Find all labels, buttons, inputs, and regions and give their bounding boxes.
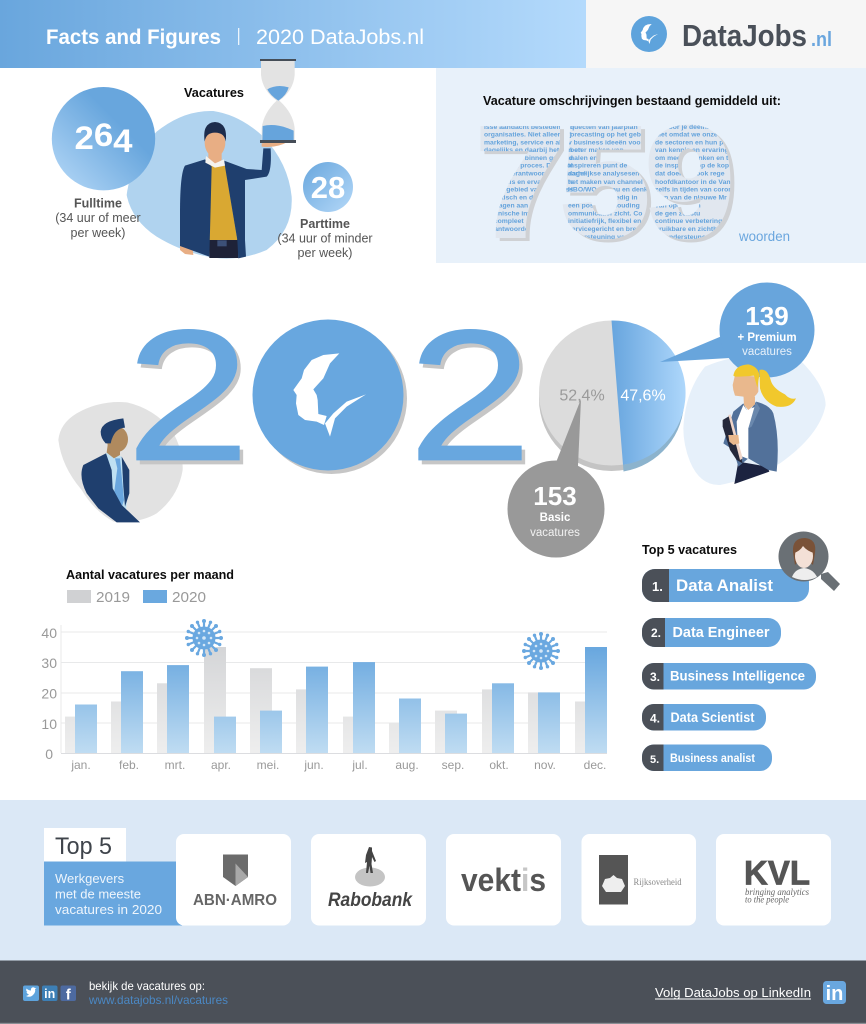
logo wordmark: DataJobs	[682, 18, 807, 53]
heading: top 5 vacatures: Top 5 vacatures	[642, 543, 737, 557]
big number 759: v business ideeën voor	[568, 140, 644, 146]
card: KVL: KVL	[744, 854, 810, 892]
item 5: 5.	[650, 754, 659, 766]
pie chart	[539, 320, 686, 472]
callout: basic: 153	[533, 481, 577, 511]
item 2: 2.	[651, 626, 661, 640]
grey slice	[539, 320, 684, 466]
month labels: okt.	[489, 758, 509, 772]
item 1	[642, 569, 809, 602]
hourglass	[260, 59, 296, 143]
card: Rijksoverheid	[582, 834, 696, 926]
label: employers: vacatures in 2020	[55, 902, 162, 917]
illustration: man in suit	[58, 402, 183, 522]
big number 759: een positieve houding	[568, 202, 640, 210]
item 2: Data Engineer	[672, 625, 770, 641]
stat: parttime 28	[303, 162, 353, 212]
callout: basic	[508, 399, 604, 558]
panel: top employers	[0, 800, 866, 961]
blob	[127, 111, 292, 259]
big number 759: HBO/WO niveau en denk	[568, 186, 648, 194]
label: employers	[44, 862, 182, 926]
month labels	[70, 758, 606, 772]
label woorden: woorden	[738, 229, 790, 244]
grey blob	[58, 402, 183, 522]
y axis labels: 40	[41, 625, 57, 641]
big number 759: nalen en de	[570, 155, 608, 162]
big number 759: dagelijkse analysesen	[568, 170, 639, 178]
label: parttime: (34 uur of minder	[277, 232, 373, 246]
callout: premium	[660, 282, 814, 378]
panel heading: Vacature omschrijvingen bestaand gemiddeld uit:	[483, 93, 781, 108]
big number 759: marketing, service en alle	[484, 140, 567, 146]
card: ABN AMRO: ABN·AMRO	[193, 892, 277, 909]
month labels: mei.	[257, 758, 279, 772]
big year digit: first 2: 2	[129, 295, 254, 504]
big number 759: 759	[478, 97, 732, 266]
label: parttime: Parttime	[300, 217, 350, 231]
stat: fulltime 264: 4	[113, 123, 133, 159]
woman backdrop blob	[683, 355, 826, 485]
label: employers: met de meeste	[55, 886, 141, 902]
big number 759: op het gebied van business	[484, 186, 573, 194]
callout: premium: 139	[745, 301, 789, 331]
stat: fulltime 264: 6	[94, 117, 113, 153]
heading: vacatures: Vacatures	[184, 85, 244, 100]
big number 759: en voor je deelname aan	[655, 124, 734, 131]
big number 759: de sectoren en hun persoon	[655, 140, 746, 146]
card: KVL	[716, 834, 831, 926]
y axis labels: 20	[41, 686, 57, 702]
icon: linkedin small: in	[44, 987, 55, 1001]
label: employers: Werkgevers	[55, 871, 125, 886]
pie depth	[539, 327, 684, 471]
big number 759: niet omdat we onze klanten	[655, 132, 743, 139]
month labels: sep.	[442, 758, 464, 772]
big year digit: first 2: 2	[126, 291, 250, 500]
chart legend	[67, 589, 206, 606]
label: fulltime: per week)	[71, 226, 125, 240]
month labels: mrt.	[165, 758, 185, 772]
big number 759: om mee te denken en te v	[655, 155, 738, 162]
big number 759: verantwoordelijk	[484, 226, 538, 233]
value: 52,4%: 52,4%	[559, 388, 605, 404]
big number 759: dagelijks en daarbij het zijn en	[484, 147, 582, 154]
big number 759: technische inv	[484, 210, 531, 218]
big number 759: zien van de nieuwe Mr	[655, 194, 727, 202]
big number 759: continue verbetering a	[655, 218, 728, 225]
item 1: 1.	[652, 579, 663, 594]
big number 759: bijdragen aan de	[484, 202, 538, 210]
big number 759: analytisch en data gericht	[484, 194, 568, 202]
footer text: bekijk: bekijk de vacatures op:	[89, 979, 205, 993]
month labels: jul.	[351, 758, 368, 772]
month labels: jun.	[303, 758, 324, 772]
callout: basic: Basic	[540, 512, 571, 524]
header banner	[0, 0, 586, 68]
big year digit: second 2: 2	[408, 291, 532, 500]
item 2	[642, 618, 781, 647]
item 3: Business Intelligence	[670, 668, 805, 684]
month labels: feb.	[119, 758, 139, 772]
card: ABN AMRO	[176, 834, 291, 926]
icon: virus november	[522, 632, 560, 670]
big number 759: en ondersteunen	[655, 234, 710, 241]
big number 759: initiatiefrijk, flexibel en	[568, 218, 641, 225]
icon: twitter	[23, 986, 39, 1001]
card: KVL: bringing analytics	[745, 887, 809, 897]
big year digit: second 2: 2	[411, 295, 536, 504]
item 4	[642, 704, 766, 730]
label: fulltime: Fulltime	[74, 196, 122, 210]
big number 759: hoofdkantoor in de Van Ne	[655, 179, 741, 186]
logo suffix: .nl	[811, 29, 832, 51]
big number 759: beter maken van	[570, 147, 624, 154]
item 3: 3.	[650, 670, 660, 684]
man figure	[180, 122, 289, 258]
logo icon	[631, 16, 667, 52]
big number 759: ondersteuning van	[568, 234, 629, 241]
blue slice	[612, 320, 686, 465]
footer link: url: www.datajobs.nl/vacatures	[88, 993, 228, 1007]
bars 2020	[75, 647, 607, 753]
big number 759: forecasting op het gebi	[568, 132, 643, 139]
heading separator	[238, 28, 239, 45]
month labels: aug.	[395, 758, 419, 772]
stat: fulltime 264	[52, 87, 155, 190]
big number 759: je bent verantwoordelijk daarhe	[483, 170, 586, 178]
icon: linkedin large: in	[826, 983, 843, 1005]
callout: basic: vacatures	[530, 527, 580, 539]
illustration: woman with books	[723, 364, 796, 484]
big number 759: en compleet	[484, 218, 524, 225]
callout: premium: vacatures	[742, 346, 792, 358]
month labels: nov.	[534, 758, 556, 772]
panel: word count	[436, 68, 866, 269]
item 1: Data Analist	[676, 577, 774, 595]
icon: virus april	[185, 619, 223, 657]
card: vektis	[446, 834, 561, 926]
big number 759: vaardig en volledig in	[568, 194, 638, 202]
y axis labels	[41, 625, 57, 762]
label: parttime	[277, 217, 373, 260]
chart legend: 2020	[172, 589, 206, 606]
y axis labels: 10	[41, 716, 57, 732]
label: top 5: Top 5	[55, 833, 112, 860]
big number 759: dat doen wij ook rege	[655, 170, 725, 178]
icon: magnifier with candidate	[778, 532, 840, 591]
illustration: man holding hourglass	[127, 59, 296, 259]
card: vektis: vektis	[461, 862, 546, 898]
callout: premium: + Premium	[737, 332, 797, 344]
footer link: follow: Volg DataJobs op LinkedIn	[655, 985, 811, 1000]
big number 759: quecten van jaarplan	[570, 124, 638, 131]
big number 759: 759	[482, 100, 736, 269]
big number 759: hij doet dit proces. Deze rol	[484, 162, 573, 170]
item 3	[642, 663, 816, 690]
big number 759: ommunicatief zicht. Co	[568, 210, 642, 218]
big number 759	[480, 124, 734, 242]
stat: fulltime 264: 2	[74, 120, 92, 156]
big number 759: bruikbare en zichtbare	[655, 226, 728, 233]
y axis labels: 0	[45, 746, 53, 762]
card: KVL: to the people	[745, 894, 789, 904]
bar chart: vacancies per month	[41, 625, 607, 772]
bars 2019	[65, 647, 597, 753]
y axis labels: 30	[41, 655, 57, 671]
big number 759: de gen zelfstu	[655, 210, 700, 218]
item 5: Business analist	[670, 753, 755, 765]
heading: facts and figures: Facts and Figures	[46, 26, 221, 49]
big number 759: de inspiratie op de kop ka	[655, 162, 739, 170]
logo panel	[586, 0, 866, 68]
big number 759: inspireren punt de	[568, 162, 628, 170]
big number 759: de analist is binnen gesteld	[484, 155, 573, 162]
item 4: 4.	[650, 712, 660, 726]
month labels: jan.	[70, 758, 91, 772]
label: fulltime: (34 uur of meer	[55, 211, 141, 225]
top list	[642, 569, 816, 771]
big number 759: het maken van channel	[568, 179, 643, 186]
icon: facebook: f	[66, 986, 72, 1004]
chart legend: 2019	[96, 589, 130, 606]
value: 47,6%: 47,6%	[620, 388, 666, 404]
footer bar	[0, 960, 866, 1024]
label: parttime: per week)	[298, 246, 352, 260]
man figure	[81, 418, 140, 522]
big number 759: van kennis en ervaring. Wij	[655, 147, 743, 154]
month labels: apr.	[211, 758, 231, 772]
chart heading: Aantal vacatures per maand	[66, 568, 234, 582]
card: Rabobank	[311, 834, 426, 926]
big number 759: zelfs in tijden van coron	[655, 186, 732, 194]
item 4: Data Scientist	[670, 710, 755, 725]
month labels: dec.	[584, 758, 606, 772]
big number 759: van open plan	[655, 202, 701, 210]
card: Rijksoverheid: Rijksoverheid	[634, 877, 682, 887]
card: Rabobank: Rabobank	[328, 890, 413, 911]
label: top 5	[44, 828, 126, 862]
big number 759: de kennis en ervaring om te	[484, 179, 574, 186]
stat: parttime 28: 28	[311, 170, 345, 205]
big number 759: servicegericht en bre	[568, 226, 637, 233]
big number 759: organisaties. Niet alleen bij	[484, 132, 572, 139]
label: fulltime	[55, 196, 141, 240]
big number 759: isse aandacht besteden aan	[484, 124, 574, 131]
icon: facebook	[60, 986, 76, 1004]
logo medallion	[252, 320, 407, 474]
item 5	[642, 744, 772, 771]
icon: linkedin small	[42, 986, 58, 1001]
heading: year and site: 2020 DataJobs.nl	[256, 26, 424, 49]
